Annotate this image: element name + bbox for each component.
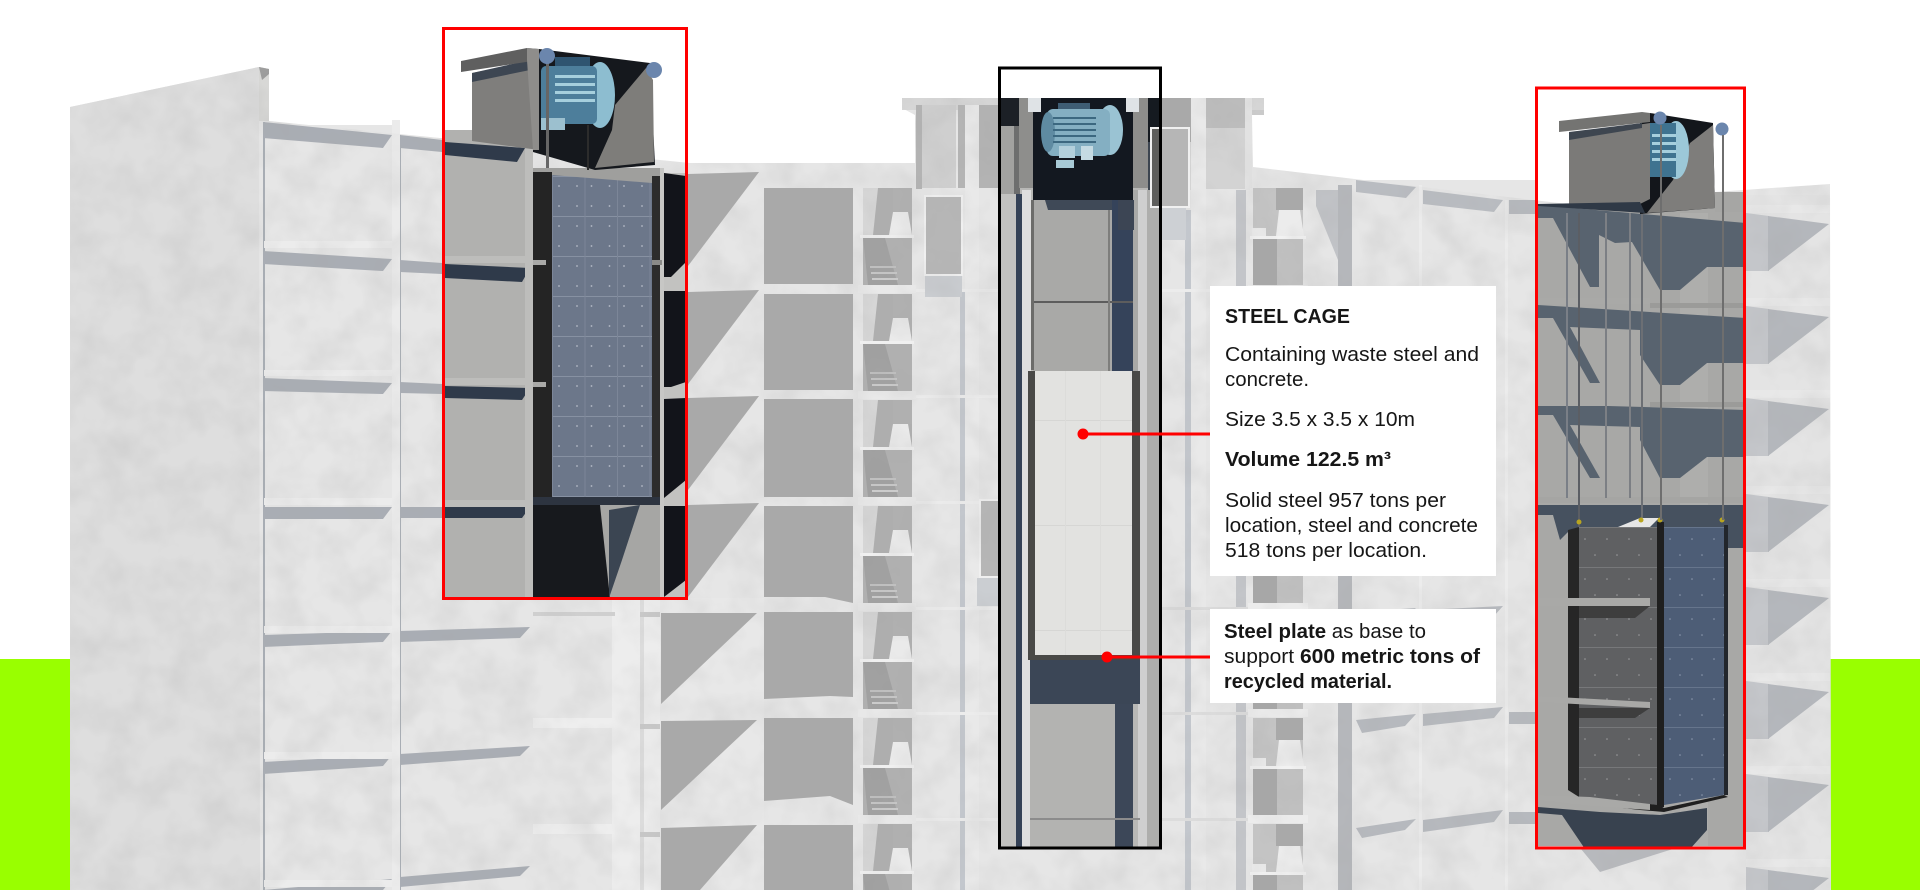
shadow below right cage box — [1581, 849, 1673, 872]
panel: left highlighted shaft — [445, 130, 688, 598]
text: tonnage: 518 tons per location. — [1225, 540, 1427, 562]
text: size: Size 3.5 x 3.5 x 10m — [1225, 409, 1415, 431]
cables and pulleys left — [546, 60, 549, 168]
frame: right red highlight — [1536, 88, 1744, 848]
heading: steel cage: STEEL CAGE — [1225, 306, 1350, 328]
leader: steel cage — [1078, 428, 1210, 440]
counterweight box left — [924, 195, 963, 297]
text: tonnage: Solid steel 957 tons per — [1225, 490, 1446, 512]
text: tonnage: location, steel and concrete — [1225, 515, 1478, 537]
rooftop winch housing right — [1538, 112, 1746, 215]
text: containing: Containing waste steel and — [1225, 344, 1479, 366]
pulleys centre — [1028, 98, 1041, 112]
ground: green right — [1830, 659, 1920, 890]
left wing: floor panels — [263, 120, 530, 890]
ground: green left — [0, 659, 71, 890]
centre-left rooms — [660, 172, 853, 890]
stairs column left — [858, 188, 916, 890]
counterweight box right — [1150, 127, 1190, 240]
callout: steel plate: Steel plate as base to — [1224, 621, 1426, 643]
steel cage left — [533, 172, 662, 497]
frame: centre black highlight — [1000, 68, 1160, 848]
shaft wall — [1033, 190, 1138, 372]
motor room — [1033, 98, 1133, 200]
frame: left red highlight — [444, 28, 686, 598]
left bay below highlighted cage — [533, 598, 663, 890]
motor right — [1650, 121, 1689, 179]
stairs column right — [1248, 188, 1308, 890]
callout: steel plate: support 600 metric tons of — [1224, 646, 1480, 668]
text: containing — [1225, 344, 1479, 391]
central tower — [902, 98, 1264, 890]
text: volume: Volume 122.5 m³ — [1225, 449, 1391, 471]
callout: steel cage — [1210, 286, 1496, 576]
leader: steel plate — [1102, 652, 1210, 662]
pulleys right — [1654, 112, 1666, 124]
text: containing: concrete. — [1225, 369, 1309, 391]
motor left — [541, 57, 615, 130]
motor centre — [1041, 103, 1123, 168]
steel cage right — [1538, 125, 1728, 849]
white steel cage — [1028, 371, 1140, 660]
left wing: end wall — [70, 67, 269, 890]
right wing: floor panels — [1316, 180, 1536, 890]
panel: right highlighted shaft — [1538, 205, 1746, 846]
right wing: end bays — [1746, 195, 1830, 890]
shadow below cage — [1030, 660, 1140, 704]
text: tonnage — [1225, 490, 1478, 562]
counterweight box centre — [977, 499, 1019, 606]
rooftop winch housing left — [461, 48, 662, 170]
callout: steel plate: recycled material. — [1224, 671, 1392, 693]
callout: steel plate — [1210, 609, 1496, 703]
panel: black highlighted shaft — [998, 98, 1162, 848]
